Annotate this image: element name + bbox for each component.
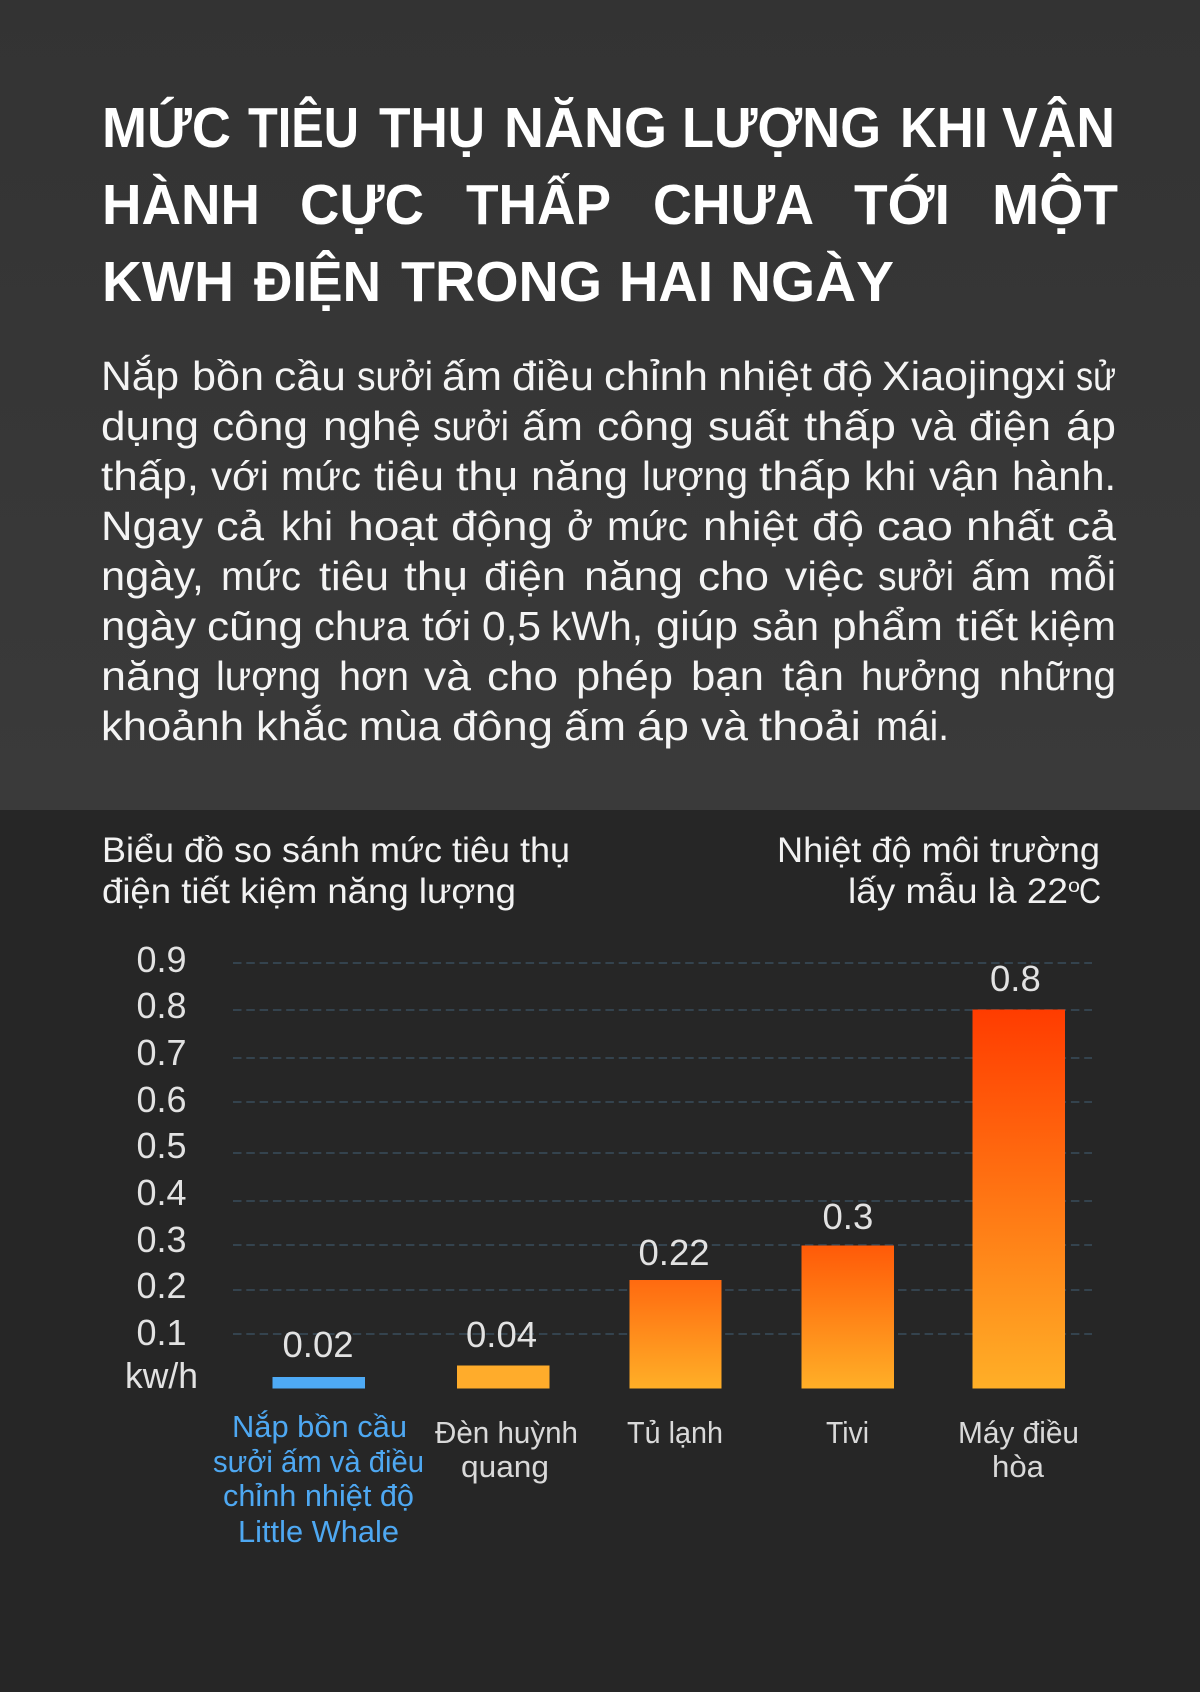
bar: refrigerator 0.22 <box>630 1232 722 1388</box>
y axis labels: 0.9 <box>136 939 187 980</box>
y axis labels: 0.5 <box>136 1125 187 1166</box>
text block: description paragraph: suất <box>708 403 790 449</box>
heading: sampling temperature note: C <box>1079 872 1101 911</box>
title: NGÀY <box>730 250 894 314</box>
bar: Little Whale seat 0.02 <box>272 1324 365 1388</box>
text block: description paragraph: hơn <box>339 653 409 699</box>
text block: description paragraph: Nắp <box>101 353 179 399</box>
text block: description paragraph <box>101 353 1116 749</box>
text block: description paragraph: khoảnh <box>101 703 244 749</box>
text block: description paragraph: ở <box>567 503 593 549</box>
text block: description paragraph: cả <box>1067 503 1116 549</box>
text block: description paragraph: ngày, <box>101 553 204 599</box>
text block: description paragraph: lượng <box>642 453 748 499</box>
text block: description paragraph: mức <box>607 503 688 549</box>
heading: sampling temperature note: o <box>1068 876 1080 897</box>
title: CHƯA <box>653 173 814 237</box>
text block: description paragraph: mùa <box>359 703 441 749</box>
text block: description paragraph: kWh, <box>551 603 643 649</box>
text block: description paragraph: những <box>999 653 1116 699</box>
title: CỰC <box>300 173 424 237</box>
title: TIÊU <box>248 95 359 160</box>
bar: fluorescent lamp 0.04: 0.04 <box>466 1314 537 1355</box>
text block: description paragraph: tiết <box>956 603 1019 649</box>
category label: Little Whale seat: Nắp bồn cầu <box>232 1409 407 1444</box>
text block: description paragraph: sản <box>752 603 819 649</box>
text block: description paragraph: hoạt <box>348 503 439 549</box>
category label: air conditioner: Máy điều <box>958 1415 1079 1450</box>
text block: description paragraph: chỉnh <box>604 353 708 399</box>
heading: sampling temperature note: Nhiệt độ môi trường <box>777 831 1100 870</box>
text block: description paragraph: thụ <box>456 453 518 499</box>
text block: description paragraph: cầu <box>274 353 346 399</box>
text block: description paragraph: cả <box>216 503 264 549</box>
text block: description paragraph: thấp, <box>101 453 199 499</box>
text block: description paragraph: hành. <box>1012 453 1116 499</box>
heading: chart title: Biểu đồ so sánh mức tiêu thụ <box>102 831 570 870</box>
text block: description paragraph: vận <box>929 453 999 499</box>
text block: description paragraph: bạn <box>691 653 764 699</box>
text block: description paragraph: Ngay <box>101 503 204 549</box>
text block: description paragraph: lượng <box>216 653 321 699</box>
heading: chart title <box>102 831 570 911</box>
text block: description paragraph: nhiệt <box>718 353 813 399</box>
text block: description paragraph: ấm <box>564 703 626 749</box>
text block: description paragraph: dụng <box>101 403 199 449</box>
text block: description paragraph: cho <box>698 553 769 599</box>
text block: description paragraph: sưởi <box>433 403 509 449</box>
text block: description paragraph: động <box>451 503 553 549</box>
title: KHI <box>900 96 988 160</box>
text block: description paragraph: và <box>424 653 471 699</box>
text block: description paragraph: nghệ <box>323 403 421 449</box>
text block: description paragraph: năng <box>584 553 683 599</box>
text block: description paragraph: với <box>211 453 269 499</box>
text block: description paragraph: nhất <box>966 503 1055 549</box>
text block: description paragraph: tới <box>422 603 471 649</box>
text block: description paragraph: cho <box>487 653 558 699</box>
title: HÀNH <box>102 173 260 237</box>
text block: description paragraph: công <box>212 403 308 449</box>
y axis labels <box>125 939 198 1396</box>
text block: description paragraph: mức <box>281 453 361 499</box>
bar: Little Whale seat 0.02: 0.02 <box>282 1324 354 1365</box>
text block: description paragraph: và <box>911 403 956 449</box>
y axis labels: 0.8 <box>136 985 187 1026</box>
category label: fluorescent lamp <box>435 1415 578 1484</box>
chart: energy consumption bar chart <box>125 939 1092 1549</box>
y axis labels: 0.3 <box>136 1219 187 1260</box>
text block: description paragraph: sưởi <box>357 353 433 399</box>
text block: description paragraph: và <box>701 703 748 749</box>
title: THỤ <box>379 96 485 160</box>
text block: description paragraph: độ <box>812 503 864 549</box>
y axis labels: kw/h <box>125 1355 198 1396</box>
text block: description paragraph: phẩm <box>832 603 943 649</box>
text block: description paragraph: mỗi <box>1049 553 1116 599</box>
text block: description paragraph: kiệm <box>1029 603 1116 649</box>
text block: description paragraph: mức <box>221 553 301 599</box>
text block: description paragraph: năng <box>531 453 628 499</box>
text block: description paragraph: điều <box>512 353 594 399</box>
bar: refrigerator 0.22: 0.22 <box>638 1232 710 1273</box>
text block: description paragraph: Xiaojingxi <box>882 353 1066 399</box>
title: NĂNG <box>504 96 667 160</box>
text block: description paragraph: thấp <box>804 403 896 449</box>
text block: description paragraph: ấm <box>442 353 502 399</box>
text block: description paragraph: khắc <box>256 703 348 749</box>
y axis labels: 0.7 <box>136 1032 187 1073</box>
text block: description paragraph: mái. <box>876 703 949 749</box>
text block: description paragraph: cũng <box>207 603 303 649</box>
text block: description paragraph: tiêu <box>319 553 389 599</box>
text block: description paragraph: công <box>597 403 694 449</box>
category label: fluorescent lamp: Đèn huỳnh <box>435 1415 578 1450</box>
text block: description paragraph: năng <box>101 653 201 699</box>
text block: description paragraph: việc <box>785 553 864 599</box>
text block: description paragraph: thấp <box>759 453 851 499</box>
text block: description paragraph: khi <box>281 503 333 549</box>
title: VẬN <box>1002 95 1115 160</box>
text block: description paragraph: tiêu <box>374 453 444 499</box>
text block: description paragraph: điện <box>484 553 566 599</box>
text block: description paragraph: khi <box>864 453 916 499</box>
text block: description paragraph: tận <box>782 653 844 699</box>
bar: television 0.3: 0.3 <box>822 1196 873 1237</box>
text block: description paragraph: phép <box>576 653 673 699</box>
text block: description paragraph: sưởi <box>878 553 954 599</box>
title: KWH <box>102 250 234 314</box>
text block: description paragraph: sử <box>1076 353 1116 399</box>
title <box>102 95 1118 314</box>
category label: refrigerator: Tủ lạnh <box>627 1415 723 1450</box>
title: TRONG <box>401 250 602 314</box>
panel: upper intro background <box>0 0 1200 810</box>
text block: description paragraph: hưởng <box>861 653 981 699</box>
text block: description paragraph: nhiệt <box>703 503 799 549</box>
title: LƯỢNG <box>682 96 881 160</box>
y axis labels: 0.1 <box>136 1312 187 1353</box>
bar: television 0.3 <box>802 1196 894 1388</box>
category label: fluorescent lamp: quang <box>461 1449 549 1484</box>
category label: air conditioner <box>958 1415 1079 1484</box>
text block: description paragraph: cao <box>877 503 953 549</box>
title: HAI <box>619 250 713 314</box>
text block: description paragraph: thụ <box>404 553 468 599</box>
text block: description paragraph: ngày <box>101 603 197 649</box>
text block: description paragraph: áp <box>637 703 689 749</box>
bar: fluorescent lamp 0.04 <box>457 1314 550 1388</box>
text block: description paragraph: điện <box>969 403 1051 449</box>
text block: description paragraph: ấm <box>522 403 583 449</box>
y axis labels: 0.6 <box>136 1079 187 1120</box>
category label: air conditioner: hòa <box>992 1449 1045 1484</box>
title: MỘT <box>992 172 1118 237</box>
text block: description paragraph: thoải <box>759 703 861 749</box>
text block: description paragraph: chưa <box>314 603 409 649</box>
text block: description paragraph: bồn <box>192 353 264 399</box>
y axis labels: 0.2 <box>136 1265 187 1306</box>
category label: Little Whale seat: sưởi ấm và điều <box>213 1444 424 1479</box>
bar: air conditioner 0.8: 0.8 <box>990 958 1041 999</box>
text block: description paragraph: đông <box>452 703 553 749</box>
text block: description paragraph: 0,5 <box>482 603 541 649</box>
bar: air conditioner 0.8 <box>972 958 1065 1388</box>
heading: sampling temperature note: lấy mẫu là 22 <box>848 872 1068 911</box>
text block: description paragraph: độ <box>822 353 873 399</box>
title: MỨC <box>102 96 231 160</box>
category label: television: Tivi <box>826 1415 869 1450</box>
category label: Little Whale seat: Little Whale <box>238 1514 399 1549</box>
text block: description paragraph: ấm <box>971 553 1031 599</box>
category label: Little Whale seat <box>213 1409 424 1549</box>
title: ĐIỆN <box>254 249 381 314</box>
title: THẤP <box>466 172 611 237</box>
y axis labels: 0.4 <box>136 1172 187 1213</box>
category label: Little Whale seat: chỉnh nhiệt độ <box>223 1478 414 1513</box>
title: TỚI <box>854 173 950 237</box>
heading: chart title: điện tiết kiệm năng lượng <box>102 872 516 911</box>
text block: description paragraph: áp <box>1066 403 1116 449</box>
text block: description paragraph: giúp <box>656 603 738 649</box>
heading: sampling temperature note <box>777 831 1101 911</box>
